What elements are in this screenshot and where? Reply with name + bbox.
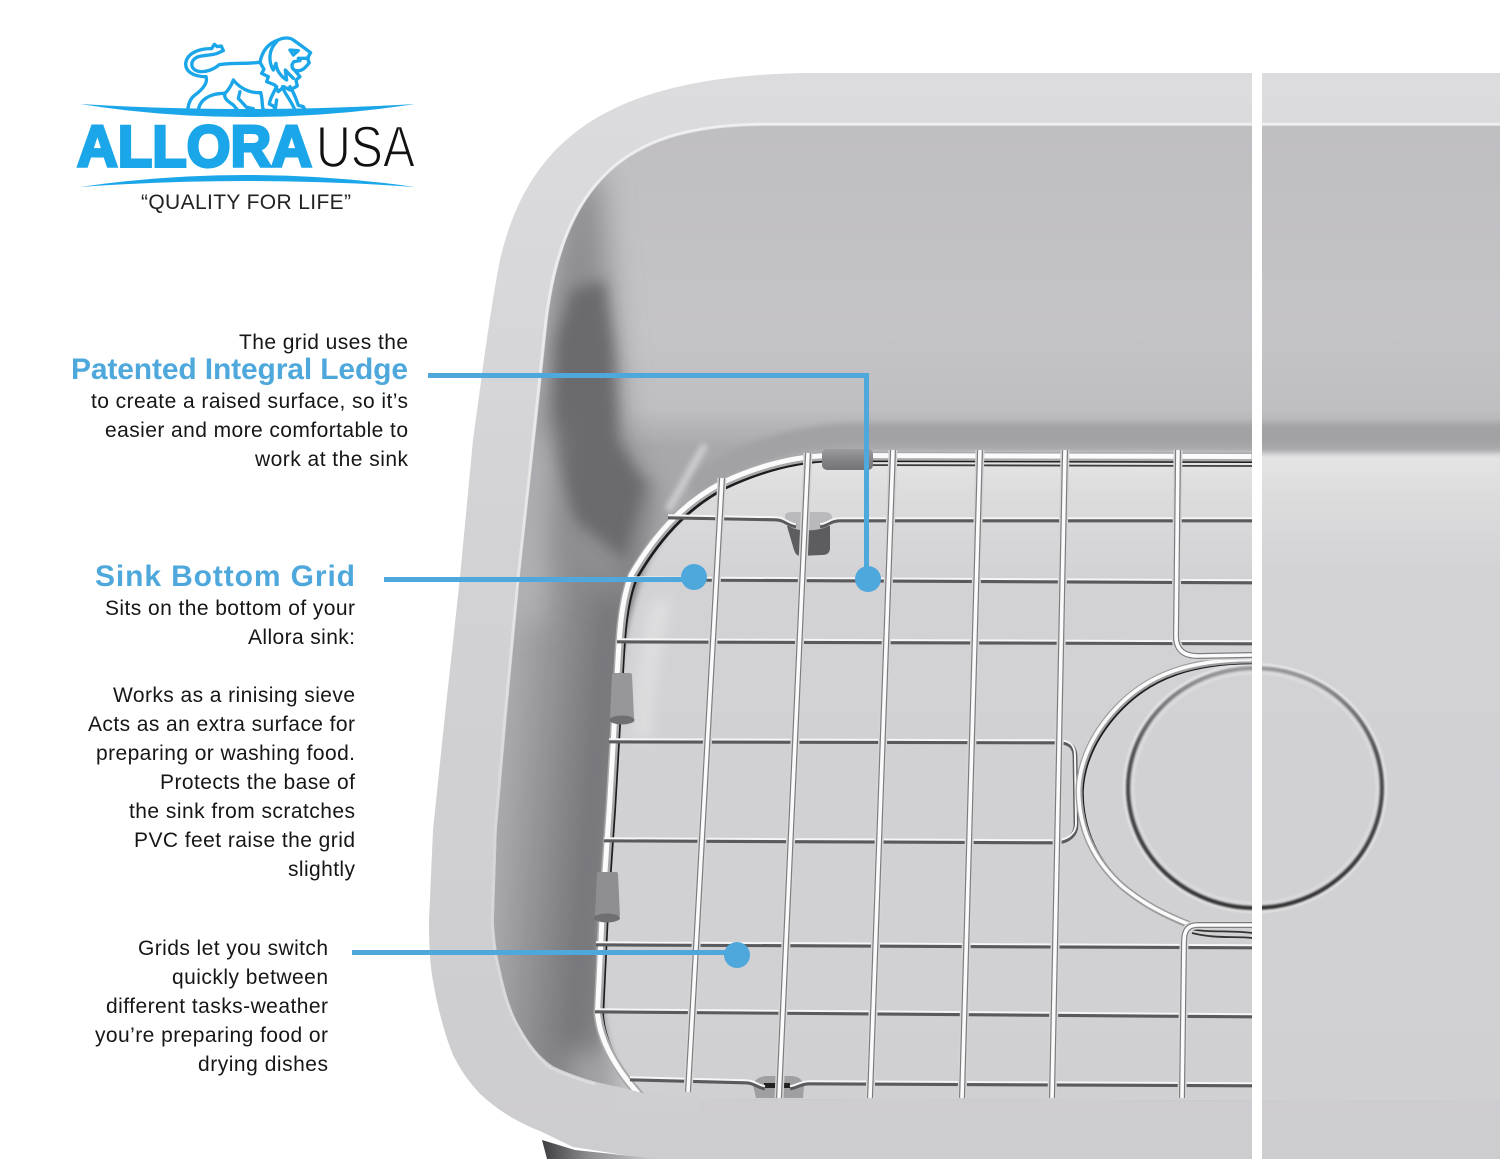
callout text: sink bottom grid: slightly — [288, 858, 356, 881]
callout text: patented integral ledge: The grid uses the — [239, 331, 408, 354]
callout text: sink bottom grid: preparing or washing food. — [96, 742, 355, 765]
tagline: “QUALITY FOR LIFE” — [141, 191, 351, 214]
arrow: ledge leader line — [428, 376, 881, 592]
callout text: sink bottom grid: the sink from scratches — [129, 800, 355, 823]
sink basin — [470, 120, 1500, 1120]
callout text: patented integral ledge: work at the sink — [254, 448, 408, 471]
callout text: switch tasks: drying dishes — [198, 1053, 328, 1076]
callout text: switch tasks: you’re preparing food or — [95, 1024, 328, 1047]
horizontal wires — [595, 515, 1252, 1088]
callout text: patented integral ledge: easier and more comfortable to — [105, 419, 408, 442]
callout text: sink bottom grid: Acts as an extra surface for — [88, 713, 355, 736]
top swoosh — [80, 104, 415, 117]
callout text: switch tasks: quickly between — [172, 966, 328, 989]
logo — [77, 38, 415, 214]
callout text: sink bottom grid — [88, 560, 356, 881]
callout text: sink bottom grid: Sits on the bottom of your — [105, 597, 355, 620]
arrow: tasks leader line — [352, 942, 750, 968]
frame wire — [598, 456, 1255, 1107]
wire grid — [594, 449, 1255, 1107]
arrow: grid leader line — [384, 564, 707, 590]
callout text: patented integral ledge: to create a raised surface, so it’s — [91, 390, 408, 413]
PVC sleeves — [594, 449, 873, 922]
sink floor — [599, 453, 1500, 1120]
callout text: switch tasks: Grids let you switch — [138, 937, 328, 960]
rim highlight line — [492, 124, 1500, 1084]
callout text: sink bottom grid: PVC feet raise the grid — [134, 829, 355, 852]
ALLORA wordmark: ALLORA — [77, 114, 312, 180]
rack feet — [753, 512, 832, 1098]
callout text: sink bottom grid: Allora sink: — [248, 626, 355, 649]
callout text: switch tasks — [95, 937, 328, 1076]
USA wordmark: USA — [316, 115, 415, 180]
bottom swoosh — [80, 175, 415, 187]
callout text: sink bottom grid: Protects the base of — [160, 771, 355, 794]
sink rim — [429, 73, 1500, 1159]
sink photo illustration — [429, 73, 1500, 1159]
callout text: patented integral ledge — [71, 331, 408, 471]
heading: patented integral ledge: Patented Integral Ledge — [71, 353, 408, 386]
icon: lion — [186, 38, 311, 112]
rim patch covering frame tail — [615, 1086, 700, 1112]
vertical wires — [688, 450, 1252, 1098]
heading: sink bottom grid: Sink Bottom Grid — [95, 560, 355, 593]
callout text: sink bottom grid: Works as a rinising sieve — [113, 684, 355, 707]
divider strip — [1252, 62, 1262, 1159]
dark wedge under rim — [542, 1140, 660, 1159]
drain — [1125, 665, 1385, 911]
callout text: switch tasks: different tasks-weather — [106, 995, 328, 1018]
drain ring wire — [1079, 660, 1254, 938]
